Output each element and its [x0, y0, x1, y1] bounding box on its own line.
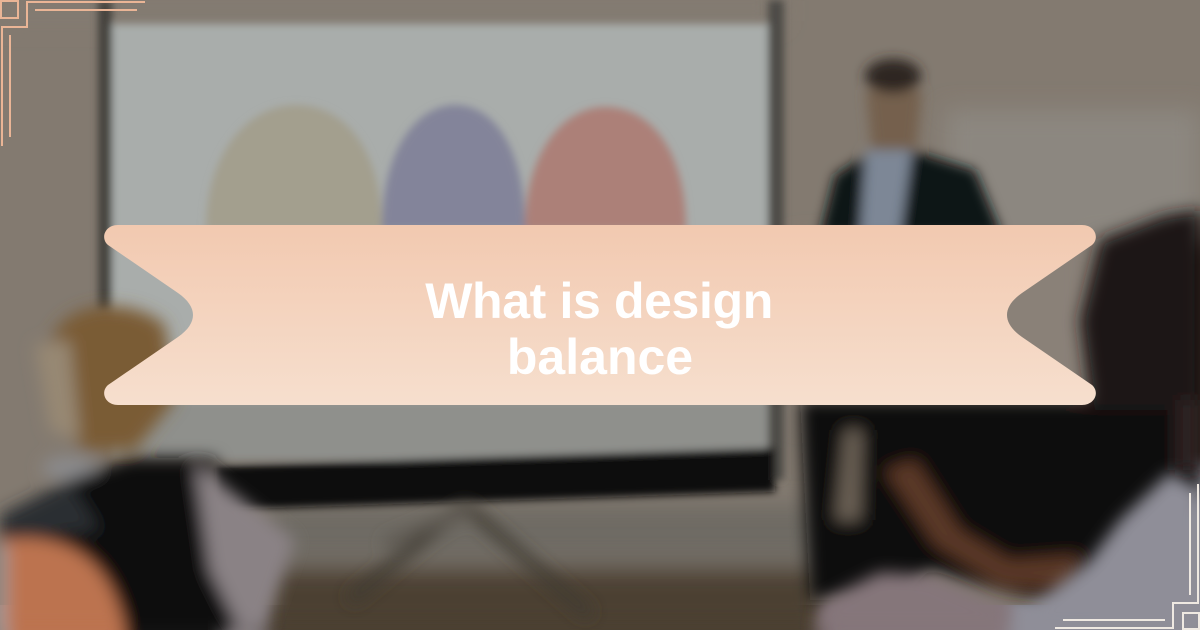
tripod	[350, 505, 590, 615]
audience left	[0, 306, 295, 630]
presenter	[820, 59, 1002, 235]
title: balance	[507, 329, 693, 385]
screen circles	[206, 105, 686, 230]
title: What is design	[425, 273, 773, 329]
corner ornament: top left	[1, 1, 145, 146]
projection screen	[98, 0, 784, 510]
ribbon banner	[104, 225, 1096, 405]
seated audience on right: shirts	[815, 472, 1200, 630]
presenter legs and seated person on right	[800, 210, 1200, 610]
corner ornament: bottom right	[1055, 484, 1199, 629]
